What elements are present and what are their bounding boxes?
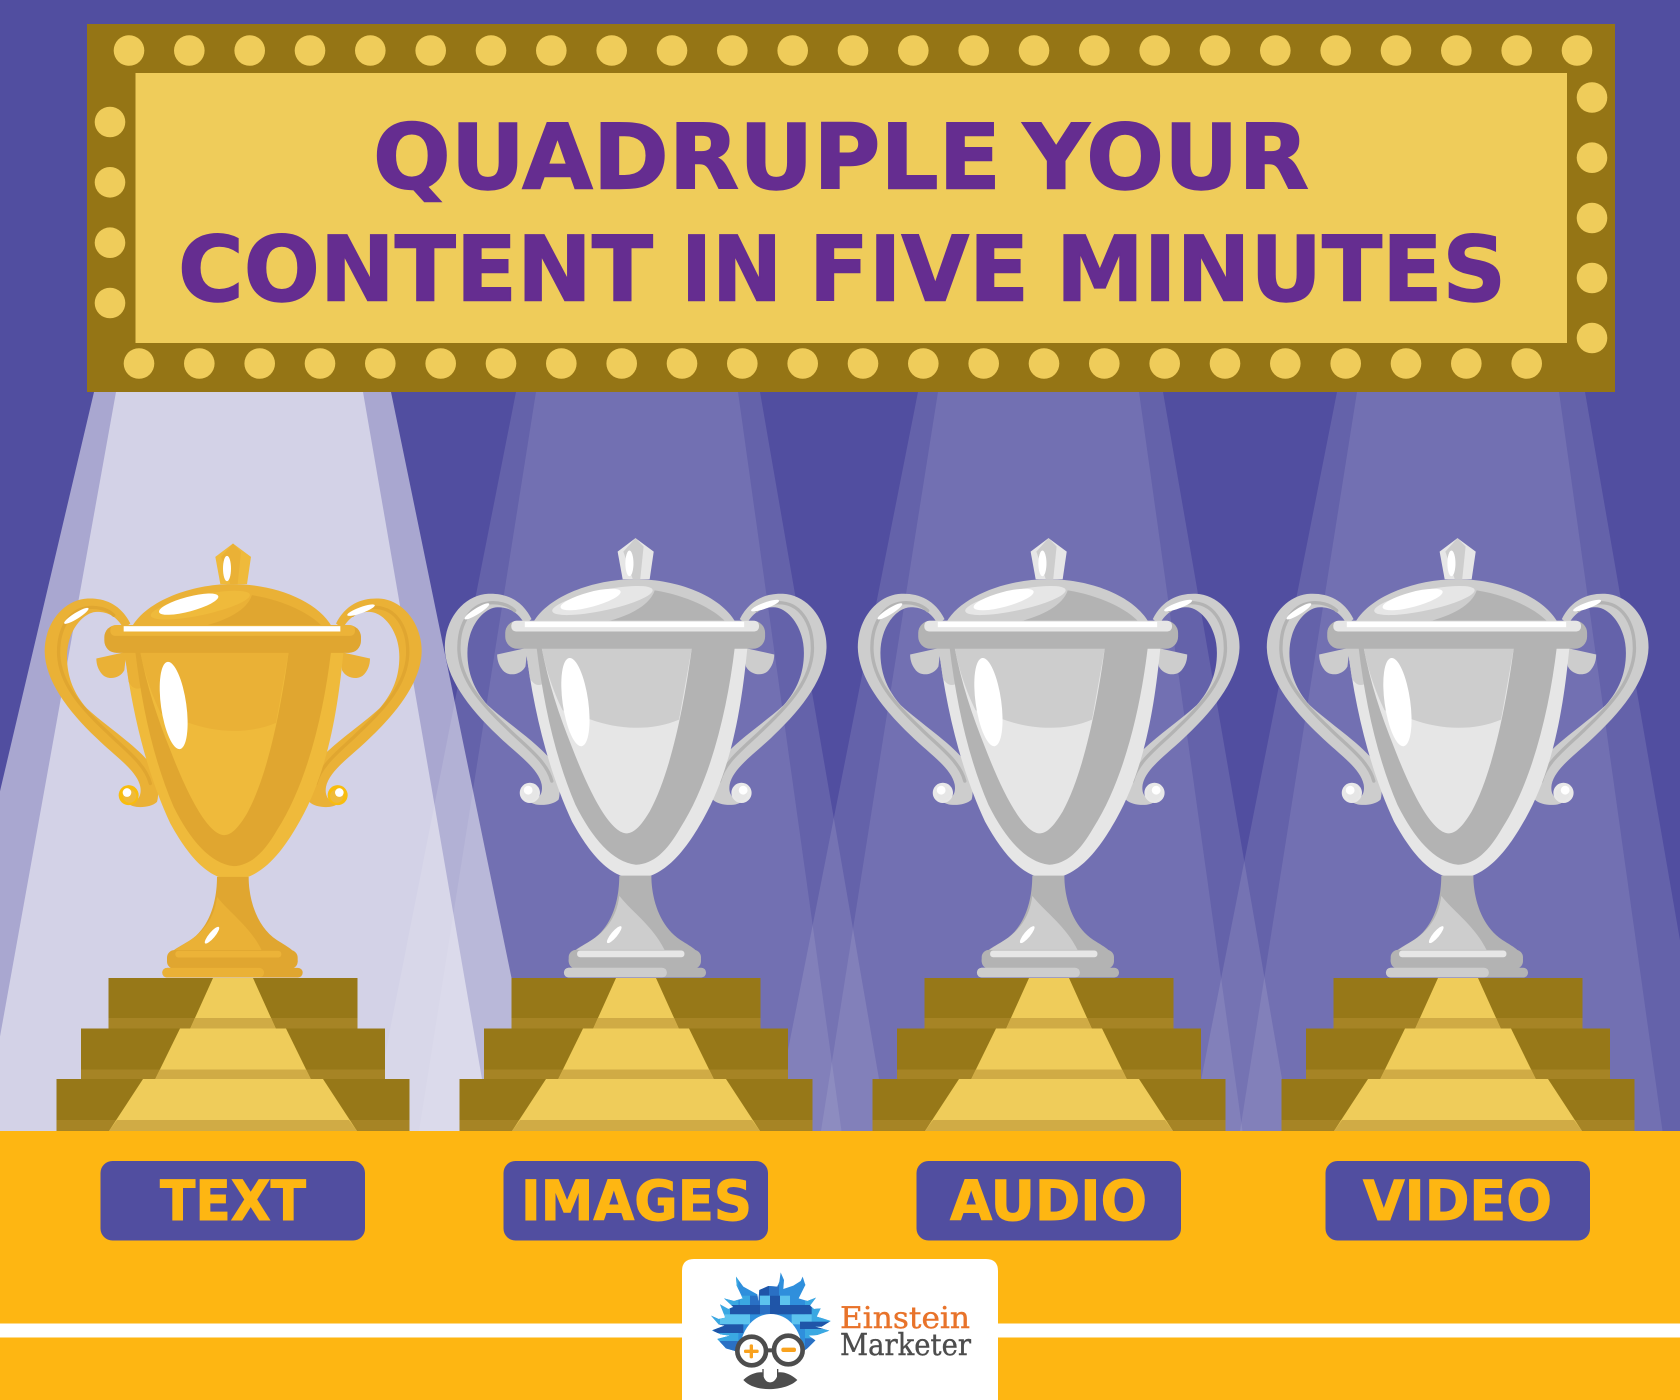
logo wordmark: Marketer [840, 1328, 972, 1363]
trophy: silver audio [858, 538, 1240, 978]
label: video [1326, 1161, 1590, 1240]
spotlight: video beam [1191, 392, 1680, 1131]
logo card [682, 1259, 998, 1400]
podium: video [1282, 978, 1634, 1131]
trophy: silver images [445, 538, 827, 978]
label: images: IMAGES [521, 1169, 752, 1234]
title [178, 106, 1506, 322]
label: audio [916, 1161, 1181, 1240]
spotlight: audio beam [772, 392, 1291, 1131]
marquee sign [87, 24, 1615, 392]
title: CONTENT [178, 218, 653, 322]
title: QUADRUPLE [373, 106, 1001, 210]
trophy: gold [45, 544, 422, 978]
label: audio: AUDIO [950, 1169, 1147, 1234]
title: MINUTES [1056, 218, 1506, 322]
title: IN [681, 218, 782, 322]
icon: Einstein head [711, 1272, 830, 1390]
marquee light bulbs [95, 35, 1607, 379]
trophy: silver video [1267, 538, 1649, 978]
title: YOUR [1022, 106, 1309, 210]
title: FIVE [809, 218, 1029, 322]
label: text: TEXT [160, 1169, 306, 1234]
podium: audio [872, 978, 1226, 1131]
logo wordmark [840, 1301, 972, 1363]
spotlight: gold beam over text trophy [0, 392, 543, 1131]
label: video: VIDEO [1363, 1169, 1552, 1234]
logo wordmark: Einstein [840, 1301, 970, 1336]
floor stripe [0, 1324, 1680, 1338]
spotlight: images beam [370, 392, 888, 1131]
podium: text [56, 978, 410, 1131]
podium: images [460, 978, 812, 1131]
stage floor [0, 1131, 1680, 1400]
label: text [100, 1161, 365, 1240]
